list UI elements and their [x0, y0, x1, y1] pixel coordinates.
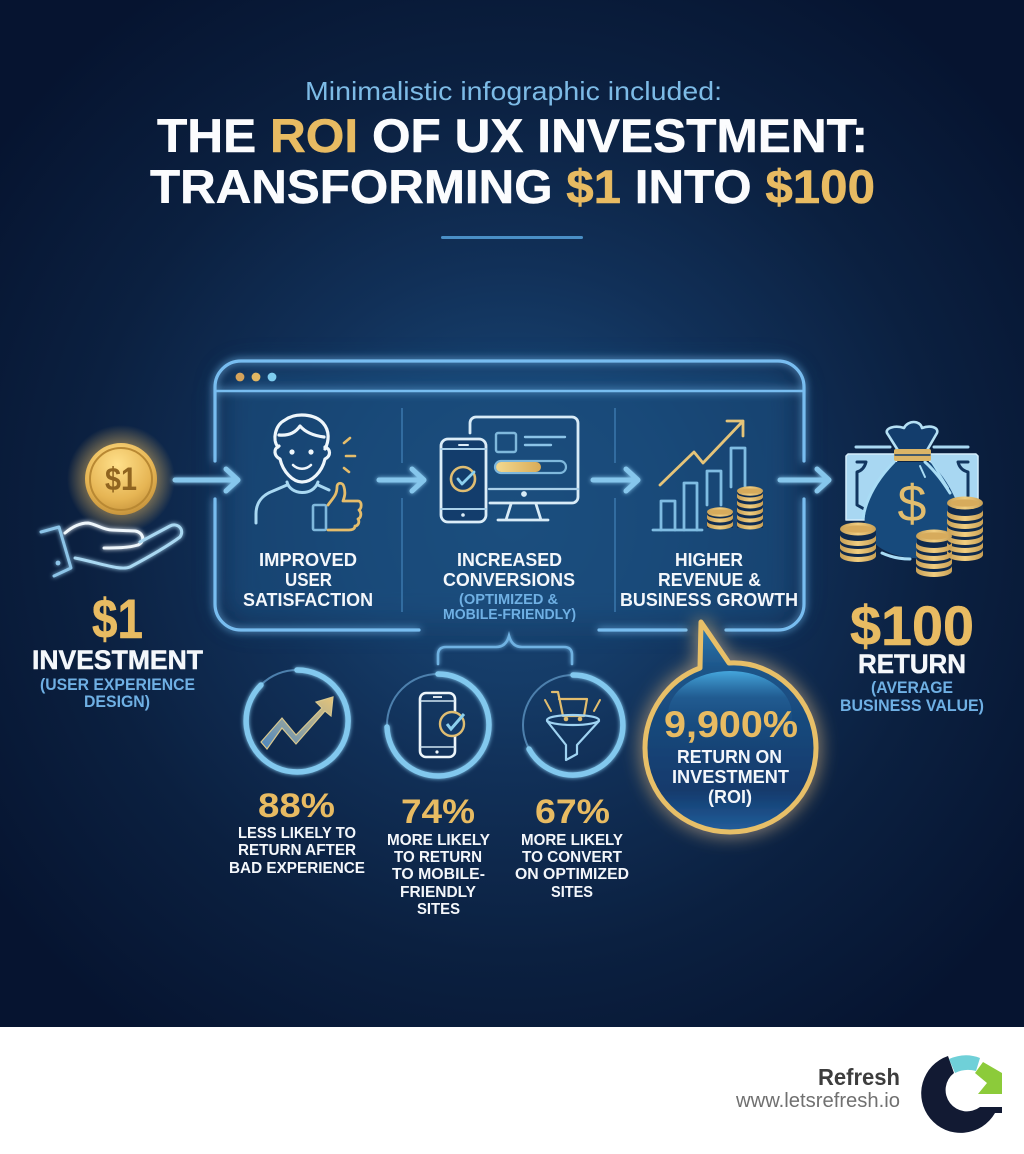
icon: gold coin — [67, 425, 175, 533]
label: $100 return: BUSINESS VALUE) — [840, 696, 984, 715]
stat: 67%: TO CONVERT — [522, 849, 623, 866]
label: $100 return: RETURN — [858, 649, 966, 679]
icon: phone and monitor — [441, 417, 578, 522]
banknotes — [846, 454, 978, 520]
label: higher revenue: HIGHER — [675, 549, 743, 570]
progress fill — [496, 462, 541, 472]
icon: stat ring cart funnel — [523, 675, 623, 775]
column dividers — [402, 408, 615, 612]
stat: 67% — [515, 793, 629, 901]
label: higher revenue: REVENUE & — [658, 569, 761, 590]
bracket to stats 74% and 67% — [438, 636, 572, 664]
phone — [441, 439, 486, 522]
label: higher revenue — [620, 549, 798, 610]
window frame — [215, 361, 804, 630]
brand name and URL: www.letsrefresh.io — [735, 1090, 900, 1112]
window dots — [236, 373, 276, 381]
monitor — [470, 417, 578, 520]
label: improved user satisfaction: IMPROVED — [259, 549, 357, 570]
stat: 74%: TO RETURN — [394, 849, 482, 866]
label: increased conversions: (OPTIMIZED & — [459, 592, 559, 608]
title: TRANSFORMING $1 INTO $100 — [150, 160, 875, 213]
stat: 74%: 74% — [401, 793, 475, 831]
icon: stat ring rising arrow — [246, 670, 348, 772]
label: improved user satisfaction: SATISFACTION — [243, 589, 373, 610]
stat: 74% — [387, 793, 491, 918]
icon: growth chart with coins — [653, 421, 763, 530]
stat: 74%: TO MOBILE- — [392, 866, 485, 883]
coin stacks — [840, 496, 983, 577]
callout: 9,900% ROI bubble: 9,900% — [664, 704, 798, 745]
stat: 74%: SITES — [417, 901, 460, 918]
icon: money bag with cash and coins — [840, 422, 983, 577]
icon: gold coin: $1 — [105, 461, 137, 497]
bag — [865, 462, 959, 558]
arrow 2 — [379, 469, 424, 491]
label: $1 investment — [32, 587, 203, 711]
label: improved user satisfaction: USER — [285, 569, 332, 590]
icon: open hand — [41, 523, 182, 576]
label: $1 investment: (USER EXPERIENCE — [40, 675, 195, 694]
label: increased conversions: CONVERSIONS — [443, 569, 575, 590]
stat: 88%: RETURN AFTER — [238, 842, 356, 859]
callout: 9,900% ROI bubble: (ROI) — [708, 787, 752, 807]
stat: 67%: 67% — [535, 793, 610, 831]
label: increased conversions — [443, 549, 576, 623]
stat: 88%: 88% — [258, 787, 335, 825]
arrow 4 — [780, 469, 829, 491]
stat: 74%: FRIENDLY — [400, 884, 477, 901]
window top highlight — [330, 360, 700, 362]
stat: 67%: SITES — [551, 884, 593, 901]
brand name and URL: Refresh — [818, 1064, 900, 1090]
stat: 67%: MORE LIKELY — [521, 832, 624, 849]
arrow 1 — [175, 469, 238, 491]
arrow 3 — [593, 469, 638, 491]
panel: browser window — [215, 361, 804, 630]
stat: 74%: MORE LIKELY — [387, 832, 491, 849]
label: $100 return: $100 — [850, 594, 974, 657]
label: $1 investment: INVESTMENT — [32, 645, 203, 675]
callout: 9,900% ROI bubble: RETURN ON — [677, 747, 782, 767]
footer band — [0, 1027, 1024, 1154]
stat: 67%: ON OPTIMIZED — [515, 866, 629, 883]
label: $1 investment: DESIGN) — [84, 692, 150, 711]
label: increased conversions: INCREASED — [457, 549, 562, 570]
connector to stat 88% — [296, 631, 298, 660]
stat: 88%: BAD EXPERIENCE — [229, 860, 365, 877]
label: $1 investment: $1 — [92, 587, 143, 650]
icon: stat ring phone check — [387, 674, 489, 776]
logo: Refresh circular arrow — [921, 1055, 1002, 1133]
eyebrow subtitle: Minimalistic infographic included: — [305, 76, 722, 106]
callout: 9,900% ROI bubble: INVESTMENT — [672, 767, 789, 787]
brand name and URL — [735, 1064, 900, 1112]
stat: 88% — [229, 787, 365, 877]
label: $100 return: (AVERAGE — [871, 678, 953, 697]
title: THE ROI OF UX INVESTMENT: — [157, 109, 868, 162]
icon: smiling user with thumbs up — [256, 415, 361, 530]
label: increased conversions: MOBILE-FRIENDLY) — [443, 607, 576, 623]
label: improved user satisfaction — [243, 549, 373, 610]
label: higher revenue: BUSINESS GROWTH — [620, 589, 798, 610]
title rule — [441, 236, 583, 239]
dollar sign: $ — [898, 475, 927, 533]
label: $100 return — [840, 594, 984, 715]
stat: 88%: LESS LIKELY TO — [238, 825, 356, 842]
callout: 9,900% ROI bubble — [645, 622, 816, 832]
title — [150, 109, 875, 213]
